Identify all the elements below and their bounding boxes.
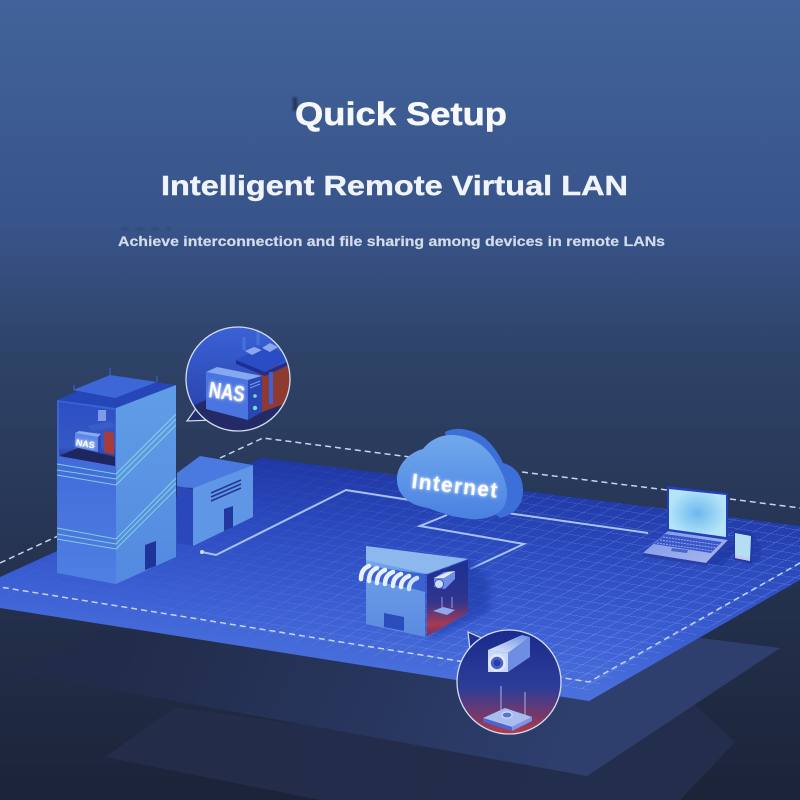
dashed boundary (0, 438, 800, 682)
desk devices (245, 347, 262, 355)
title: Quick Setup (295, 96, 507, 132)
tower cutaway floor (59, 402, 115, 466)
lower shadow layer 2 (15, 630, 780, 776)
laptop (643, 486, 742, 566)
office tower (57, 368, 176, 584)
subtitle: Intelligent Remote Virtual LAN (161, 170, 628, 201)
laptop shadow (706, 541, 742, 566)
description: Achieve interconnection and file sharing among devices in remote LANs (118, 233, 665, 249)
camera callout bubble (457, 630, 561, 734)
store cutaway (427, 560, 468, 636)
bubble router (483, 686, 532, 731)
cloud label: Internet (410, 470, 498, 503)
tower left face (57, 400, 116, 584)
tower NAS: NAS (75, 438, 96, 450)
laptop base (643, 531, 728, 563)
tower roof (57, 377, 176, 408)
store camera (434, 571, 455, 589)
phone (734, 530, 762, 564)
tower door (145, 541, 156, 570)
network cables (200, 490, 648, 569)
tower NAS (75, 431, 101, 452)
tower right face (116, 385, 176, 584)
cloud front (397, 435, 507, 519)
store shadow (428, 559, 490, 640)
bubble camera (488, 635, 530, 672)
platform grid (0, 458, 800, 690)
cloud back (445, 429, 523, 518)
red wall (258, 364, 290, 412)
lower shadow layer 3 (105, 700, 735, 800)
NAS callout bubble (185, 326, 291, 432)
store (360, 546, 490, 640)
smudge artefacts (122, 97, 297, 229)
laptop lid (667, 486, 728, 540)
desk (237, 347, 285, 372)
platform surface (0, 458, 800, 701)
store roof (366, 546, 468, 574)
cloud: Internet (397, 429, 523, 519)
warehouse vents (211, 480, 241, 501)
store awning (360, 566, 425, 592)
store front (366, 546, 425, 637)
tower desk and computer (88, 410, 114, 431)
store door (384, 613, 404, 631)
NAS callout bubble: NAS (207, 377, 246, 407)
tower light stripes (57, 414, 176, 549)
warehouse door (224, 506, 233, 531)
laptop screen (669, 489, 726, 537)
title text block (118, 96, 665, 249)
warehouse (177, 456, 253, 546)
laptop keyboard (654, 534, 722, 553)
NAS box (206, 367, 262, 380)
store router (433, 597, 455, 615)
platform (0, 438, 800, 701)
